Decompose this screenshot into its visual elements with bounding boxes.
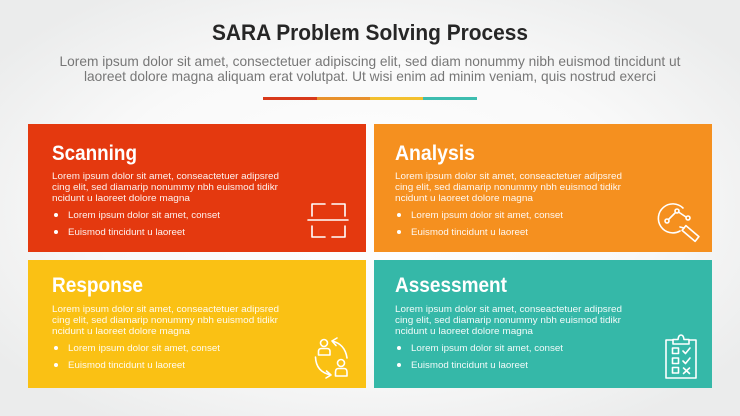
panel: scanning: [28, 124, 366, 252]
panel: assessment: [374, 260, 712, 388]
text block: response description: Lorem ipsum dolor sit amet, conseactetuer adipsred: [52, 303, 279, 314]
bullet list: scanning: Lorem ipsum dolor sit amet, conset: [68, 209, 220, 220]
bullet list: response: Lorem ipsum dolor sit amet, conset: [68, 342, 220, 353]
colour divider bar: [263, 97, 477, 100]
bullet list: response: [54, 342, 220, 370]
icon: people exchange cycle: [316, 338, 347, 378]
bullet list: scanning: Euismod tincidunt u laoreet: [68, 226, 185, 237]
bullet list: scanning: [54, 209, 220, 237]
heading: analysis: Analysis: [395, 142, 475, 165]
bullet list: analysis: [397, 209, 563, 237]
text block: assessment description: Lorem ipsum dolor sit amet, conseactetuer adipsred: [395, 303, 622, 314]
bullet list: assessment: [397, 342, 563, 370]
heading: response: Response: [52, 274, 143, 297]
heading: scanning: Scanning: [52, 142, 137, 165]
text block: response description: cing elit, sed diamarip nonummy nbh euismod tidikr: [52, 314, 278, 325]
text block: analysis description: [395, 170, 622, 203]
text block: assessment description: cing elit, sed diamarip nonummy nbh euismod tidikr: [395, 314, 621, 325]
text block: assessment description: [395, 303, 622, 336]
bullet list: analysis: Lorem ipsum dolor sit amet, conset: [411, 209, 563, 220]
text block: analysis description: Lorem ipsum dolor sit amet, conseactetuer adipsred: [395, 170, 622, 181]
subtitle text block: [60, 53, 681, 84]
text block: assessment description: ncidunt u laoreet dolore magna: [395, 325, 534, 336]
text block: analysis description: ncidunt u laoreet dolore magna: [395, 192, 534, 203]
panel: analysis: [374, 124, 712, 252]
icon: scan frame: [308, 204, 348, 237]
title: SARA Problem Solving Process: [212, 20, 528, 45]
icon: clipboard checklist: [666, 335, 696, 378]
panel: response: [28, 260, 366, 388]
subtitle text block: laoreet dolore magna aliquam erat volutpat. Ut wisi enim ad minim veniam, quis nostrud exerci: [84, 68, 656, 84]
text block: scanning description: ncidunt u laoreet dolore magna: [52, 192, 191, 203]
heading: assessment: Assessment: [395, 274, 507, 297]
text block: response description: ncidunt u laoreet dolore magna: [52, 325, 191, 336]
icon: magnifier with graph: [658, 204, 699, 241]
bullet list: assessment: Euismod tincidunt u laoreet: [411, 359, 528, 370]
subtitle text block: Lorem ipsum dolor sit amet, consectetuer adipiscing elit, sed diam nonummy nibh euismod tincidunt ut: [60, 53, 681, 69]
text block: response description: [52, 303, 279, 336]
bullet list: assessment: Lorem ipsum dolor sit amet, conset: [411, 342, 563, 353]
bullet list: response: Euismod tincidunt u laoreet: [68, 359, 185, 370]
text block: scanning description: cing elit, sed diamarip nonummy nbh euismod tidikr: [52, 181, 278, 192]
text block: scanning description: [52, 170, 279, 203]
text block: scanning description: Lorem ipsum dolor sit amet, conseactetuer adipsred: [52, 170, 279, 181]
bullet list: analysis: Euismod tincidunt u laoreet: [411, 226, 528, 237]
text block: analysis description: cing elit, sed diamarip nonummy nbh euismod tidikr: [395, 181, 621, 192]
